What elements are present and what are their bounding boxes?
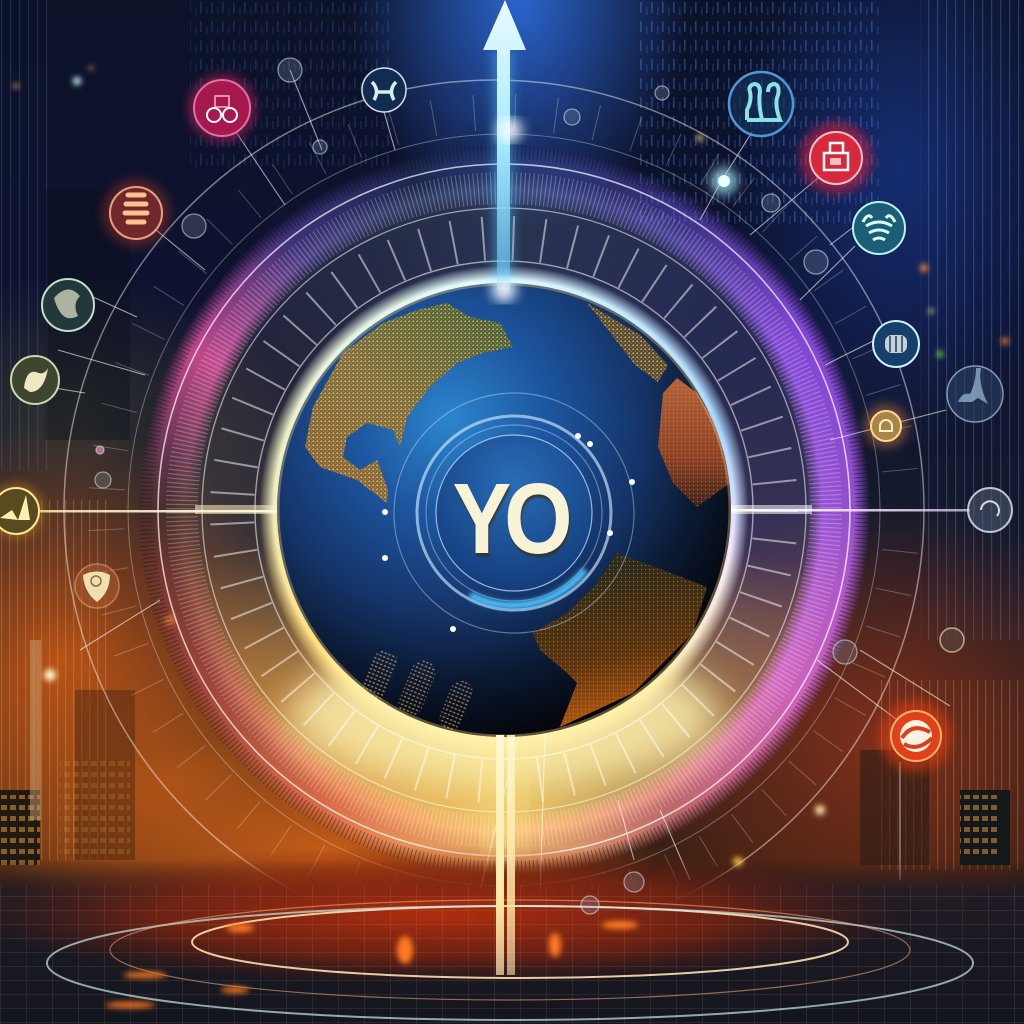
icon: link white (362, 68, 406, 112)
icon: data badge (873, 321, 919, 367)
icon: small right node (940, 628, 964, 652)
northern landmass (587, 303, 668, 382)
inner translucent band (169, 175, 839, 845)
YO label: YO (452, 463, 566, 575)
icon: dark profile (947, 366, 1003, 422)
icon: wifi teal (853, 202, 905, 254)
icon: rings pink (188, 74, 256, 142)
africa (658, 378, 730, 507)
lower left data towers (362, 650, 472, 730)
icon: green badge (42, 279, 94, 331)
icon: red stack (102, 179, 170, 247)
icon: gold left badge (0, 483, 44, 539)
icon: orange node (864, 404, 908, 448)
south america (533, 553, 707, 727)
outer hatched colour band (134, 140, 874, 880)
icon: olive badge (11, 356, 59, 404)
glowing node (710, 167, 738, 195)
rainbow halo rings (142, 149, 870, 873)
icon: people blue (729, 72, 793, 136)
icon: right ring (968, 488, 1012, 532)
icon: orange swirl (880, 700, 952, 772)
north america (305, 303, 513, 503)
icon: map pin (75, 564, 119, 608)
globe (277, 283, 731, 737)
globe rim glow (259, 265, 749, 755)
small nodes (95, 58, 857, 914)
icon: red disk (800, 122, 872, 194)
bottom rim shadow (278, 284, 730, 736)
